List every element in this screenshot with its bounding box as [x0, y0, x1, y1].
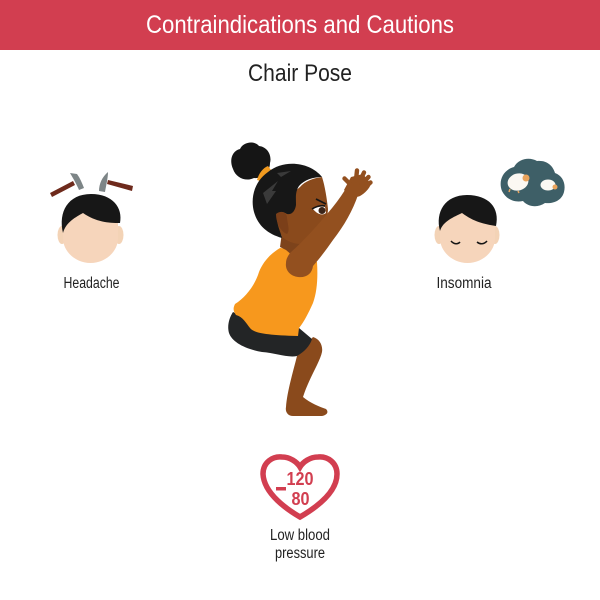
eye: [312, 199, 326, 214]
shorts: [228, 312, 312, 356]
raised arm and hand: [286, 170, 371, 277]
label: Low blood: [270, 527, 330, 544]
icon: right hammer: [99, 172, 133, 192]
icon: heart with readings: 80: [292, 489, 310, 509]
icon: left hammer: [50, 173, 84, 197]
head and face: [270, 177, 328, 244]
icon: sleeping head: [434, 195, 500, 263]
ear: [276, 212, 289, 234]
hair bun: [231, 142, 271, 180]
icon: thought cloud with sheep: [501, 159, 565, 206]
neck: [280, 232, 310, 262]
hair tie: [257, 166, 271, 182]
condition: low blood pressure: [263, 457, 337, 562]
icon: heart with readings: 120: [286, 469, 314, 489]
label: Headache: [64, 275, 120, 292]
header banner: [0, 0, 600, 50]
hair highlights: [263, 171, 291, 204]
figure: woman in chair pose: [228, 142, 371, 416]
label: Insomnia: [436, 275, 492, 292]
icon: head: [58, 194, 124, 263]
label: pressure: [275, 545, 325, 562]
title: Contraindications and Cautions: [146, 11, 454, 39]
leg and foot: [286, 337, 327, 416]
condition: headache: [50, 172, 133, 292]
hair: [253, 164, 322, 238]
sleeveless orange top: [234, 248, 317, 336]
condition: insomnia: [434, 159, 565, 292]
pose name heading: Chair Pose: [248, 60, 352, 87]
icon: heart with readings: [263, 457, 337, 517]
